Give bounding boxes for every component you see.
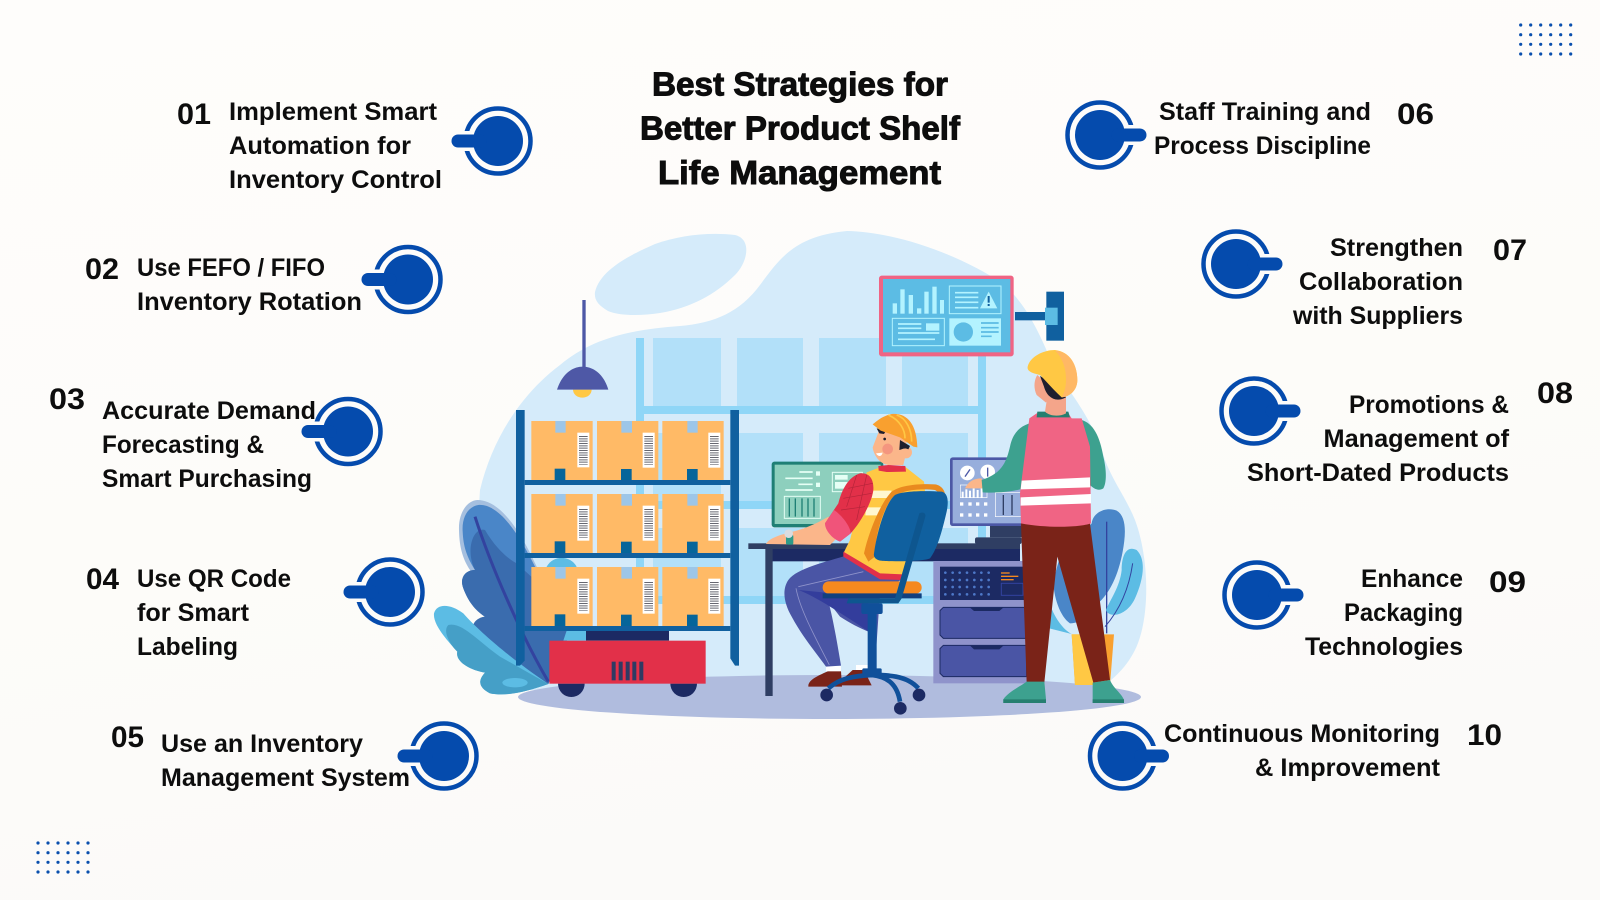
item 10: text and number: & Improvement xyxy=(1255,754,1441,782)
item 07: icon xyxy=(1204,232,1276,296)
item 04: text and number xyxy=(86,563,291,661)
item 10: text and number xyxy=(1164,719,1502,782)
item 05: text and number: Management System xyxy=(161,764,410,792)
item 07: text and number: Strengthen xyxy=(1330,234,1463,262)
warehouse illustration xyxy=(434,231,1146,719)
office chair xyxy=(820,484,948,715)
zoom-space group: right half xyxy=(748,276,1143,715)
item 07: text and number xyxy=(1292,234,1527,330)
shoes xyxy=(808,671,842,687)
item 09: text and number: 09 xyxy=(1489,566,1526,599)
item 05: text and number: Use an Inventory xyxy=(161,730,363,758)
head xyxy=(1045,397,1066,416)
item 02: text and number: Inventory Rotation xyxy=(137,288,362,316)
item 08: icon xyxy=(1222,378,1294,444)
red cart xyxy=(549,631,706,697)
background shelving xyxy=(636,338,986,604)
desk xyxy=(748,543,1020,696)
item 02: text and number xyxy=(85,253,362,316)
item 07: text and number: Collaboration xyxy=(1299,268,1463,296)
item 03: icon xyxy=(308,399,380,464)
boots xyxy=(1003,682,1046,703)
zoom-space group: left half xyxy=(434,300,739,697)
shirt sleeve xyxy=(825,473,873,542)
dot pattern bottom left xyxy=(36,841,90,874)
item 03: text and number: Forecasting & xyxy=(102,431,264,459)
helmet xyxy=(873,414,917,447)
item 03: text and number: Smart Purchasing xyxy=(102,465,312,493)
seated worker xyxy=(766,414,927,687)
right plant and pot xyxy=(1049,509,1143,685)
item 01: text and number: 01 xyxy=(177,98,211,131)
item 10: text and number: Continuous Monitoring xyxy=(1164,720,1440,748)
arms xyxy=(982,422,1038,493)
item 08: text and number xyxy=(1247,377,1573,487)
item 08: text and number: 08 xyxy=(1537,377,1573,410)
title: Best Strategies for xyxy=(652,66,948,102)
item 04: text and number: Use QR Code xyxy=(137,565,291,593)
vest xyxy=(843,467,927,578)
item 07: text and number: 07 xyxy=(1493,234,1527,267)
floor ellipse xyxy=(518,675,1141,719)
item 09: text and number: Packaging xyxy=(1344,599,1463,627)
item 02: text and number: Use FEFO / FIFO xyxy=(137,254,325,282)
item 03: text and number xyxy=(49,383,316,493)
item 09: text and number: Technologies xyxy=(1305,633,1463,661)
hanging lamp xyxy=(557,300,608,398)
item 05: icon xyxy=(404,724,476,788)
dot pattern top right xyxy=(1519,23,1572,56)
legs xyxy=(1021,523,1110,683)
helmet xyxy=(1028,350,1077,397)
item 10: text and number: 10 xyxy=(1467,719,1502,752)
cabinet xyxy=(933,561,1028,683)
item 04: text and number: for Smart xyxy=(137,599,250,627)
item 02: icon xyxy=(368,247,440,312)
watch xyxy=(786,535,793,545)
trousers xyxy=(784,555,903,667)
control monitor xyxy=(950,457,1025,544)
item 06: text and number: Process Discipline xyxy=(1154,132,1371,160)
title: Better Product Shelf xyxy=(640,110,961,146)
item 09: text and number xyxy=(1305,565,1526,661)
forearm xyxy=(766,517,838,545)
item 09: text and number: Enhance xyxy=(1361,565,1463,593)
item 04: text and number: Labeling xyxy=(137,633,238,661)
item 06: text and number xyxy=(1154,98,1434,160)
item 04: text and number: 04 xyxy=(86,563,119,596)
item 01: text and number: Inventory Control xyxy=(229,166,442,194)
item 03: text and number: 03 xyxy=(49,383,85,416)
vest xyxy=(1020,413,1091,527)
item 07: text and number: with Suppliers xyxy=(1292,302,1463,330)
item 08: text and number: Promotions & xyxy=(1349,391,1509,419)
item 06: text and number: Staff Training and xyxy=(1159,98,1371,126)
item 06: text and number: 06 xyxy=(1397,98,1434,131)
item 08: text and number: Management of xyxy=(1324,425,1510,453)
item 04: icon xyxy=(350,560,422,624)
item 06: icon xyxy=(1068,102,1140,168)
rack with boxes xyxy=(516,410,739,666)
small cloud blob xyxy=(595,234,746,315)
plants behind rack xyxy=(434,500,586,694)
title xyxy=(640,66,961,191)
item 01: text and number: Automation for xyxy=(229,132,411,160)
item 01: icon xyxy=(458,108,530,174)
item 03: text and number: Accurate Demand xyxy=(102,397,316,425)
collar xyxy=(878,465,906,472)
green monitor xyxy=(772,462,883,527)
item 08: text and number: Short-Dated Products xyxy=(1247,459,1509,487)
standing worker xyxy=(965,350,1124,703)
background blob xyxy=(479,231,1146,692)
item 09: icon xyxy=(1224,562,1297,628)
item 01: text and number xyxy=(177,98,442,194)
hand xyxy=(965,478,983,488)
wall mounted dashboard screen xyxy=(879,276,1064,356)
item 05: text and number: 05 xyxy=(111,721,144,754)
item 02: text and number: 02 xyxy=(85,253,119,286)
item 05: text and number xyxy=(111,721,410,792)
item 10: icon xyxy=(1090,724,1162,788)
item 01: text and number: Implement Smart xyxy=(229,98,438,126)
head xyxy=(900,446,912,458)
title: Life Management xyxy=(658,154,941,191)
